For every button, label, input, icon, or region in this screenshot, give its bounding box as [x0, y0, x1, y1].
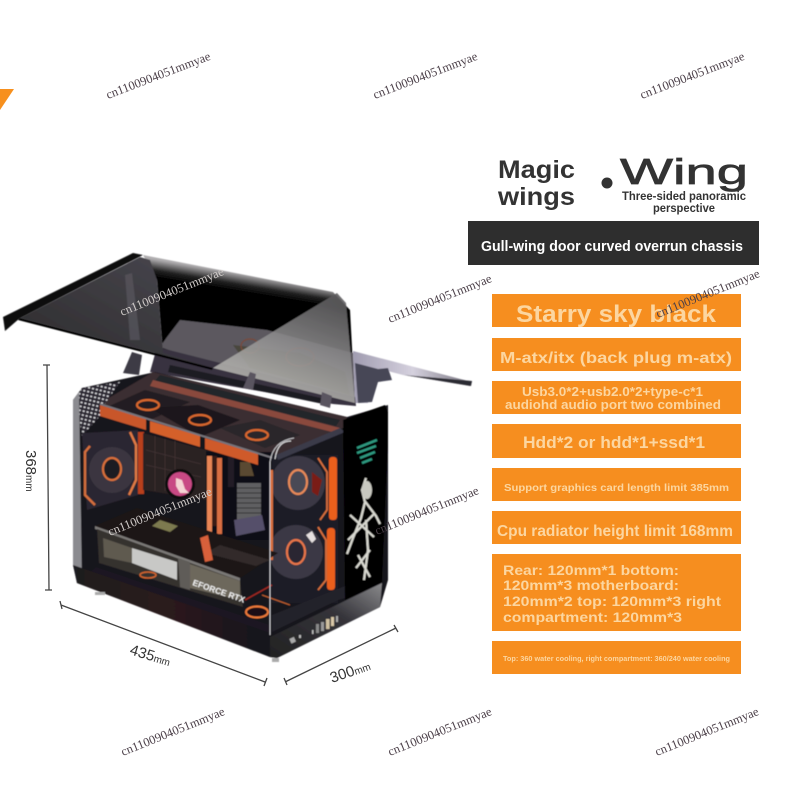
panel: ports: audiohd audio port two combined — [505, 398, 721, 412]
graphics card: EFORCE RTX — [191, 577, 247, 605]
title: Magic wings: Magic — [498, 156, 575, 184]
panel: ports — [492, 381, 741, 414]
rear fan — [82, 430, 144, 510]
panel: colour — [492, 294, 741, 328]
watermarks: cn1100904051mmyae — [654, 266, 762, 321]
hinge band — [150, 347, 356, 406]
panel: colour: Starry sky black — [516, 301, 716, 328]
watermarks: cn1100904051mmyae — [104, 49, 213, 102]
panel: fan support: 120mm*3 motherboard: — [503, 578, 679, 593]
panel: fan support — [492, 554, 741, 631]
panel: ports: Usb3.0*2+usb2.0*2+type-c*1 — [522, 385, 703, 399]
panel: drives: Hdd*2 or hdd*1+ssd*1 — [523, 433, 705, 452]
chassis product photo — [3, 253, 472, 662]
subtitle: Three-sided panoramic — [622, 191, 747, 203]
panel: fan support: compartment: 120mm*3 — [503, 610, 683, 625]
watermarks: cn1100904051mmyae — [386, 271, 494, 326]
watermarks: cn1100904051mmyae — [118, 264, 226, 319]
subtitle — [622, 191, 747, 215]
watermarks: cn1100904051mmyae — [371, 49, 480, 102]
panel: fan support: 120mm*2 top: 120mm*3 right — [503, 594, 722, 609]
right side art panel — [343, 405, 388, 600]
feet — [95, 592, 279, 662]
right base with IO ports — [270, 583, 382, 658]
front glass edge — [270, 438, 294, 635]
chassis floor — [90, 567, 345, 633]
panel: graphics card limit: Support graphics card length limit 385mm — [504, 482, 729, 494]
panel: water cooling: Top: 360 water cooling, right compartment: 360/240 water cooling — [503, 654, 730, 663]
panel: motherboard: M-atx/itx (back plug m-atx) — [500, 350, 732, 367]
logo: Wing: Wing — [620, 151, 748, 192]
panel: cpu radiator limit — [492, 511, 741, 544]
top fans — [105, 390, 300, 448]
dimension: width 300mm: 300mm — [328, 657, 373, 687]
dimension: height 368mm: 368 mm — [22, 450, 39, 492]
top hinge rail — [100, 372, 347, 458]
title: Magic wings: wings — [497, 183, 575, 211]
perforated left wall — [76, 382, 120, 436]
panel: graphics card limit — [492, 468, 741, 501]
watermarks: cn1100904051mmyae — [386, 704, 494, 759]
watermarks: cn1100904051mmyae — [653, 704, 761, 759]
watermarks: cn1100904051mmyae — [119, 704, 227, 759]
watermarks: cn1100904051mmyae — [638, 49, 747, 102]
front orange rail — [100, 403, 273, 465]
panel: cpu radiator limit: Cpu radiator height limit 168mm — [497, 523, 733, 540]
front base — [73, 565, 270, 657]
dimension: length 435mm — [60, 601, 267, 686]
logo dot — [602, 178, 612, 188]
dimension: height 368mm — [22, 365, 52, 590]
orange corner triangle — [0, 89, 14, 110]
watermarks — [104, 49, 762, 759]
panel: motherboard — [492, 338, 741, 371]
panel: drives — [492, 424, 741, 458]
panel: fan support: Rear: 120mm*1 bottom: — [503, 563, 679, 578]
banner: gull-wing door: Gull-wing door curved overrun chassis — [481, 239, 743, 255]
dimension: length 435mm: 435mm — [128, 642, 173, 670]
open gull-wing lid — [3, 253, 472, 406]
watermarks: cn1100904051mmyae — [106, 484, 214, 539]
subtitle: perspective — [653, 203, 715, 215]
motherboard area with cooler — [143, 433, 274, 540]
title: Magic wings — [497, 156, 575, 211]
right compartment fans — [269, 428, 345, 603]
chassis body — [73, 372, 388, 658]
watermarks: cn1100904051mmyae — [373, 483, 481, 538]
banner: gull-wing door — [468, 221, 759, 265]
graphics card — [95, 508, 278, 607]
dimension: width 300mm — [284, 625, 398, 687]
panel: water cooling — [492, 641, 741, 674]
